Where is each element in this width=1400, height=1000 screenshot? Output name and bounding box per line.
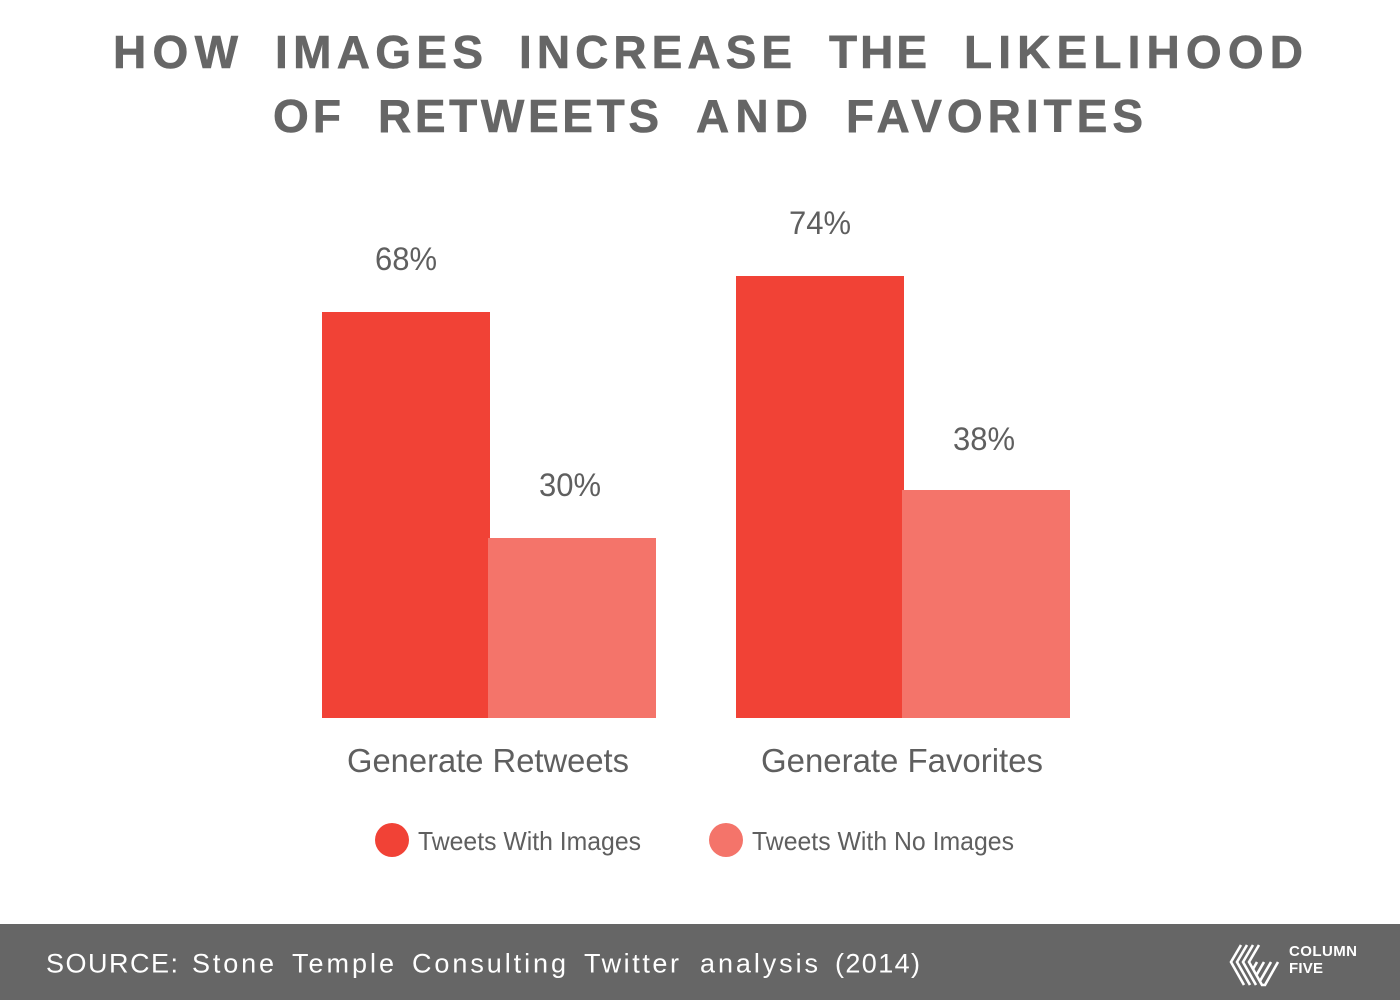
title: THE (829, 26, 927, 78)
bar: retweets no images 30% (488, 538, 656, 718)
bar: favorites no images 38% (902, 490, 1070, 718)
logo wordmark: COLUMN (1289, 943, 1357, 960)
axis label: Generate Retweets: Generate Retweets (347, 742, 629, 779)
title: AND (696, 90, 808, 142)
title: IMAGES (275, 26, 483, 78)
footer bar (0, 924, 1400, 1000)
bar chart (322, 205, 1070, 779)
title: RETWEETS (378, 90, 659, 142)
bar: favorites with images 74% (736, 276, 904, 718)
value: 30%: 30% (539, 467, 601, 503)
legend (375, 823, 1014, 857)
source text (46, 948, 920, 978)
group: Generate Retweets (322, 241, 656, 779)
icon: Column Five logo mark (1231, 945, 1278, 985)
source text: Twitter (584, 948, 679, 978)
title: LIKELIHOOD (964, 26, 1303, 78)
value: 74%: 74% (789, 205, 851, 241)
logo wordmark: FIVE (1289, 960, 1323, 977)
source text: analysis (700, 948, 818, 978)
title: HOW (113, 26, 239, 78)
legend item: Tweets With No Images: Tweets With No Images (752, 826, 1014, 856)
source text: Consulting (412, 948, 566, 978)
axis label: Generate Favorites: Generate Favorites (761, 742, 1043, 779)
value: 68%: 68% (375, 241, 437, 277)
legend item: Tweets With Images: Tweets With Images (418, 826, 641, 856)
value: 38%: 38% (953, 421, 1015, 457)
group: Generate Favorites (736, 205, 1070, 779)
source text: (2014) (835, 948, 920, 978)
source text: Temple (292, 948, 394, 978)
source text: SOURCE: (46, 948, 178, 978)
title: INCREASE (519, 26, 792, 78)
title: OF (273, 90, 341, 142)
title: FAVORITES (846, 90, 1143, 142)
source text: Stone (192, 948, 274, 978)
title (113, 26, 1303, 142)
logo wordmark (1289, 943, 1357, 977)
bar: retweets with images 68% (322, 312, 490, 718)
